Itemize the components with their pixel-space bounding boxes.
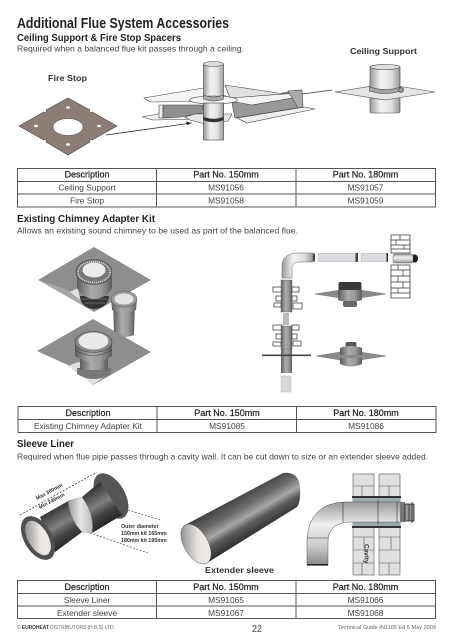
- footer: copyright: © EUROHEAT DISTRIBUTORS (H.B.S) LTD.: [17, 624, 115, 631]
- illustration: cavity wall with flue: [307, 474, 414, 575]
- table: chimney adapter parts: Part No. 180mm: [333, 408, 399, 418]
- dimension: sleeve length: Min 240mm: [38, 492, 66, 511]
- label: extender sleeve: Extender sleeve: [205, 566, 275, 575]
- table: sleeve liner parts: Part No. 150mm: [193, 582, 259, 592]
- heading: existing chimney adapter kit: Existing Chimney Adapter Kit: [17, 214, 156, 225]
- illustration: flue through ceiling joists: [142, 62, 315, 140]
- diagram: balanced flue through chimney: [262, 235, 418, 392]
- icon: upper chimney section: [273, 280, 302, 318]
- table: sleeve liner parts: Part No. 180mm: [333, 582, 398, 592]
- table: ceiling support parts: MS91057: [348, 182, 384, 192]
- label: outer diameter: 150mm kit 165mm: [121, 531, 167, 537]
- table: sleeve liner parts: [18, 580, 436, 618]
- dimension: outer diameter guides: [90, 510, 160, 553]
- line: ceiling support leader: [302, 90, 332, 94]
- table: chimney adapter parts: MS91086: [348, 421, 384, 431]
- text: chimney description: Allows an existing sound chimney to be used as part of the balanced flue.: [17, 226, 298, 236]
- illustration: chimney adapter sleeve: [111, 291, 137, 337]
- icon: fire stop plate: [19, 98, 117, 155]
- arrow: fire stop to joist: [106, 122, 192, 135]
- footer: page number: 22: [252, 624, 262, 635]
- icon: horizontal flue with elbow: [282, 253, 418, 278]
- icon: cavity wall bricks: [353, 474, 400, 575]
- table: ceiling support parts: Fire Stop: [70, 196, 104, 206]
- table: ceiling support parts: MS91058: [208, 196, 244, 206]
- label: fire stop: Fire Stop: [48, 74, 87, 83]
- icon: adapter top view: [315, 282, 386, 307]
- dimension: sleeve length: [20, 472, 97, 515]
- table: ceiling support parts: MS91059: [348, 196, 384, 206]
- label: cavity: Cavity: [362, 544, 370, 564]
- heading: ceiling support and fire stop spacers: Ceiling Support & Fire Stop Spacers: [17, 33, 182, 44]
- label: outer diameter: Outer diameter: [121, 524, 159, 530]
- label: outer diameter: [121, 524, 167, 544]
- table: sleeve liner parts: MS91066: [348, 595, 384, 605]
- label: ceiling support: Ceiling Support: [350, 47, 417, 56]
- table: ceiling support parts: Part No. 150mm: [193, 170, 259, 180]
- table: chimney adapter parts: Part No. 150mm: [194, 408, 260, 418]
- table: chimney adapter parts: Description: [65, 408, 111, 418]
- table: sleeve liner parts: MS91065: [208, 595, 244, 605]
- dimension: sleeve length: Max 360mm: [35, 482, 64, 502]
- table: sleeve liner parts: Extender sleeve: [57, 608, 117, 618]
- illustration: chimney adapter upper plate: [38, 247, 151, 312]
- heading: sleeve liner: Sleeve Liner: [17, 439, 74, 450]
- table: ceiling support parts: [18, 168, 436, 207]
- icon: elbow and sleeve: [307, 496, 414, 566]
- icon: lower chimney section: [262, 318, 311, 392]
- text: sleeve liner description: Required when flue pipe passes through a cavity wall. It can be cut down to size or an extender sleeve added.: [17, 452, 428, 462]
- illustration: extender sleeve: [175, 473, 300, 569]
- table: sleeve liner parts: MS91067: [208, 608, 244, 618]
- table: ceiling support parts: Description: [64, 170, 110, 180]
- table: chimney adapter parts: [18, 406, 436, 432]
- table: ceiling support parts: Ceiling Support: [58, 182, 116, 192]
- label: outer diameter: 180mm kit 195mm: [121, 538, 167, 544]
- table: chimney adapter parts: Existing Chimney Adapter Kit: [34, 421, 143, 431]
- text: ceiling requirement: Required when a balanced flue kit passes through a ceiling.: [17, 44, 244, 54]
- title: Additional Flue System Accessories: [17, 16, 229, 32]
- table: chimney adapter parts: MS91085: [209, 421, 245, 431]
- icon: wall brickwork outlet: [391, 235, 410, 298]
- illustration: chimney adapter lower plate: [37, 319, 151, 385]
- table: sleeve liner parts: Description: [64, 582, 110, 592]
- table: ceiling support parts: MS91056: [208, 182, 244, 192]
- illustration: telescopic sleeve liner: [14, 467, 136, 566]
- icon: ceiling support: [335, 64, 435, 113]
- footer: guide reference: Technical Guide IN1105 Ed 5 May 2009: [338, 625, 436, 631]
- table: ceiling support parts: Part No. 180mm: [333, 170, 398, 180]
- icon: adapter lower view: [316, 342, 386, 366]
- table: sleeve liner parts: MS91068: [348, 608, 384, 618]
- table: sleeve liner parts: Sleeve Liner: [64, 595, 110, 605]
